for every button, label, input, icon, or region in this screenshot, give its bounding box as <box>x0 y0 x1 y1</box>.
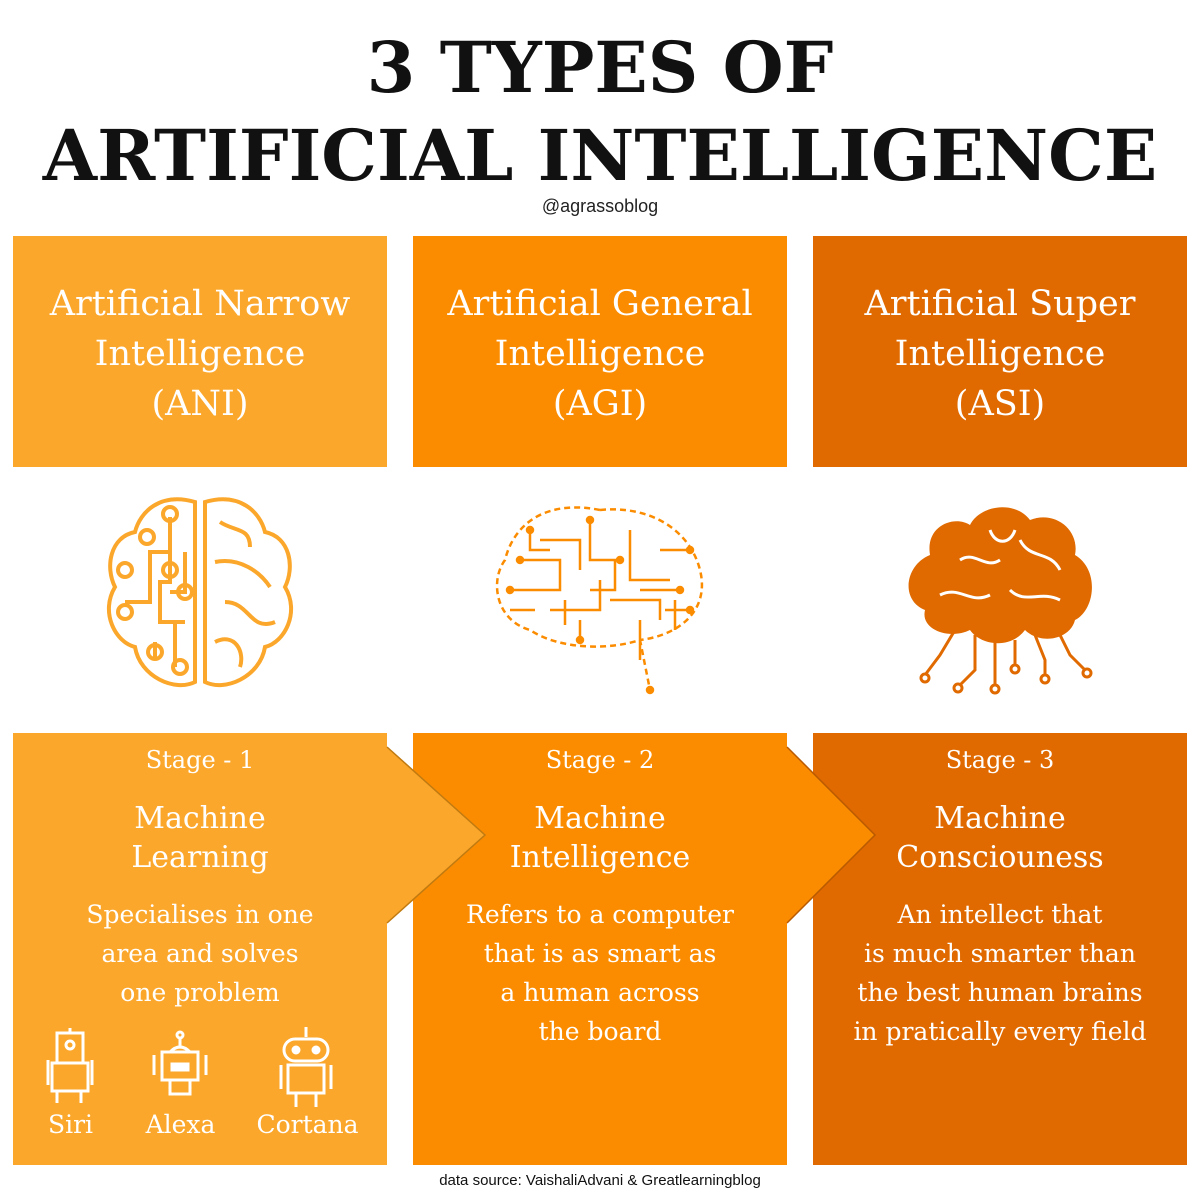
text: stage 2: Refers to a computer <box>466 900 734 929</box>
text: stage 2: a human across <box>500 978 700 1007</box>
header: ANI: (ANI) <box>151 384 249 424</box>
text: stage 1: Specialises in one <box>86 900 314 929</box>
panel: stage 3 background <box>813 733 1187 1165</box>
text: stage 2: the board <box>539 1017 661 1046</box>
icon: Cortana robot <box>280 1027 332 1107</box>
text: stage 2: Stage - 2 <box>546 746 654 774</box>
text: stage 2: Machine <box>534 801 666 836</box>
text: stage 3: Machine <box>934 801 1066 836</box>
header: ASI <box>813 236 1187 467</box>
text: stage 3: An intellect that <box>898 900 1102 929</box>
header: ANI: Artificial Narrow <box>50 284 350 324</box>
header: AGI: (AGI) <box>553 384 647 424</box>
text: stage 2: Intelligence <box>510 840 690 875</box>
panel: stage 1 background with arrow <box>13 733 486 1165</box>
text: stage 1 <box>86 746 314 1007</box>
header: AGI <box>413 236 787 467</box>
text: stage 3: the best human brains <box>857 978 1143 1007</box>
icon: brain AGI <box>496 506 704 694</box>
header: AGI: Intelligence <box>495 334 705 374</box>
header: ASI: (ASI) <box>955 384 1045 424</box>
labels: Siri <box>48 1110 93 1139</box>
text: stage 3: Consciouness <box>896 840 1104 875</box>
icon: Siri robot <box>46 1028 94 1103</box>
icon: brain ANI <box>106 497 294 688</box>
text: stage 1: Machine <box>134 801 266 836</box>
header: AGI: Artificial General <box>447 284 753 324</box>
icon: brain ASI <box>908 507 1092 694</box>
header: ANI: Intelligence <box>95 334 305 374</box>
title: ARTIFICIAL INTELLIGENCE <box>43 114 1157 197</box>
panel: stage 2 background with arrow <box>413 733 876 1165</box>
text: stage 1: one problem <box>120 978 280 1007</box>
title <box>42 26 1157 197</box>
icons: assistants: Cortana <box>256 1110 359 1139</box>
text: stage 3 <box>853 746 1147 1046</box>
text: stage 2: that is as smart as <box>484 939 716 968</box>
header: ASI: Intelligence <box>895 334 1105 374</box>
source: data source: VaishaliAdvani & Greatlearningblog <box>439 1172 761 1189</box>
icons: assistants <box>46 1027 359 1139</box>
text: stage 3: in pratically every field <box>853 1017 1147 1046</box>
text: stage 1: Learning <box>131 840 269 875</box>
header: ASI: Artificial Super <box>865 284 1135 324</box>
text: stage 3: is much smarter than <box>864 939 1136 968</box>
handle: @agrassoblog <box>542 196 658 216</box>
text: stage 2 <box>466 746 734 1046</box>
title: 3 TYPES OF <box>367 26 833 109</box>
icons: assistants: Alexa <box>146 1110 215 1139</box>
icon: Alexa robot <box>152 1030 208 1096</box>
text: stage 3: Stage - 3 <box>946 746 1054 774</box>
header: ANI <box>13 236 387 467</box>
text: stage 1: area and solves <box>101 939 299 968</box>
text: stage 1: Stage - 1 <box>146 746 254 774</box>
